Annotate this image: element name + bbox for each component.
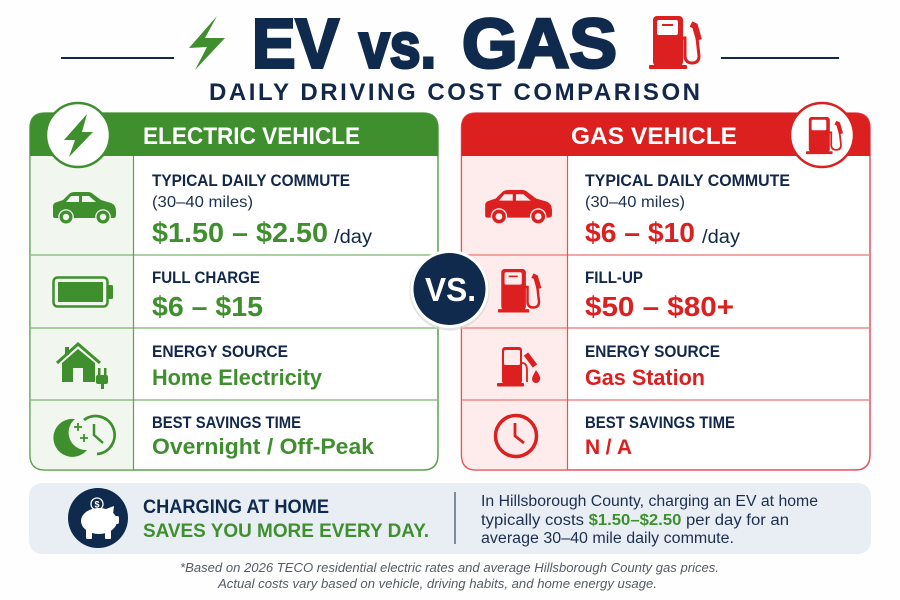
row: gas energy source: ENERGY SOURCE (585, 343, 720, 361)
row: EV full charge (54, 269, 263, 322)
icon: green car (53, 192, 116, 225)
callout body text: In Hillsborough County, charging an EV at home (481, 493, 818, 510)
heading: electric vehicle: ELECTRIC VEHICLE (143, 123, 360, 150)
heading: gas vehicle: GAS VEHICLE (571, 123, 737, 150)
icon: header fuel pump badge (790, 103, 854, 167)
icon: battery (54, 278, 113, 306)
icon: header lightning bolt badge (46, 103, 110, 167)
row: gas daily commute: $6 – $10 (585, 217, 695, 248)
footnote (180, 561, 719, 591)
icon: piggy bank: $ (94, 500, 100, 510)
row: gas energy source (497, 343, 720, 390)
row: gas daily commute (485, 172, 790, 248)
title text: EV (252, 4, 339, 82)
title text: vs. (359, 10, 436, 82)
row: gas fill-up (498, 269, 734, 322)
row: EV daily commute: /day (334, 227, 373, 248)
callout heading (143, 497, 429, 542)
row: gas energy source: Gas Station (585, 365, 705, 390)
icon: house with plug (57, 344, 108, 389)
title text: GAS (462, 4, 617, 82)
title block (61, 4, 839, 106)
row: EV energy source: Home Electricity (152, 365, 322, 390)
icon: clock (496, 416, 536, 456)
callout body text (481, 493, 818, 547)
footnote: *Based on 2026 TECO residential electric rates and average Hillsborough County gas prices. (180, 561, 719, 575)
row: EV energy source (57, 343, 322, 390)
row: EV best savings time: BEST SAVINGS TIME (152, 414, 301, 432)
row: EV energy source: ENERGY SOURCE (152, 343, 288, 361)
row: gas daily commute: TYPICAL DAILY COMMUTE (585, 172, 790, 190)
callout heading: SAVES YOU MORE EVERY DAY. (143, 521, 429, 542)
subtitle: DAILY DRIVING COST COMPARISON (209, 79, 700, 106)
row: EV full charge: $6 – $15 (152, 291, 263, 322)
row: EV daily commute: $1.50 – $2.50 (152, 217, 328, 248)
panel: electric vehicle (30, 103, 438, 470)
icon: pump with fuel drop (497, 347, 540, 386)
callout body text: typically costs $1.50–$2.50 per day for an (481, 512, 789, 529)
VS. badge: VS. (425, 271, 476, 308)
callout body text: average 30–40 mile daily commute. (481, 530, 734, 547)
row: EV best savings time: Overnight / Off-Peak (152, 434, 374, 459)
title text (252, 4, 617, 82)
row: gas daily commute: (30–40 miles) (585, 194, 685, 211)
row: EV daily commute: (30–40 miles) (152, 194, 253, 211)
row: EV daily commute: TYPICAL DAILY COMMUTE (152, 172, 350, 190)
icon: fuel pump (498, 269, 539, 312)
icon: title fuel pump (649, 16, 699, 69)
row: gas fill-up: $50 – $80+ (585, 291, 734, 322)
VS. badge (410, 250, 490, 330)
row: gas best savings time: N/A (585, 436, 632, 459)
savings banner (29, 483, 871, 554)
icon: red car (485, 190, 552, 225)
icon: title lightning bolt (189, 16, 225, 70)
panel: gas vehicle (462, 103, 870, 470)
row: gas fill-up: FILL-UP (585, 269, 643, 287)
row: gas best savings time: BEST SAVINGS TIME (585, 414, 735, 432)
row: EV full charge: FULL CHARGE (152, 269, 260, 287)
icon: piggy bank (68, 488, 128, 548)
footnote: Actual costs vary based on vehicle, driving habits, and home energy usage. (217, 577, 657, 591)
row: EV daily commute (53, 172, 373, 248)
icon: moon and clock (53, 416, 115, 457)
row: gas daily commute: /day (702, 227, 741, 248)
callout heading: CHARGING AT HOME (143, 497, 329, 518)
row: gas best savings time (496, 414, 735, 459)
row: EV best savings time (53, 414, 374, 459)
